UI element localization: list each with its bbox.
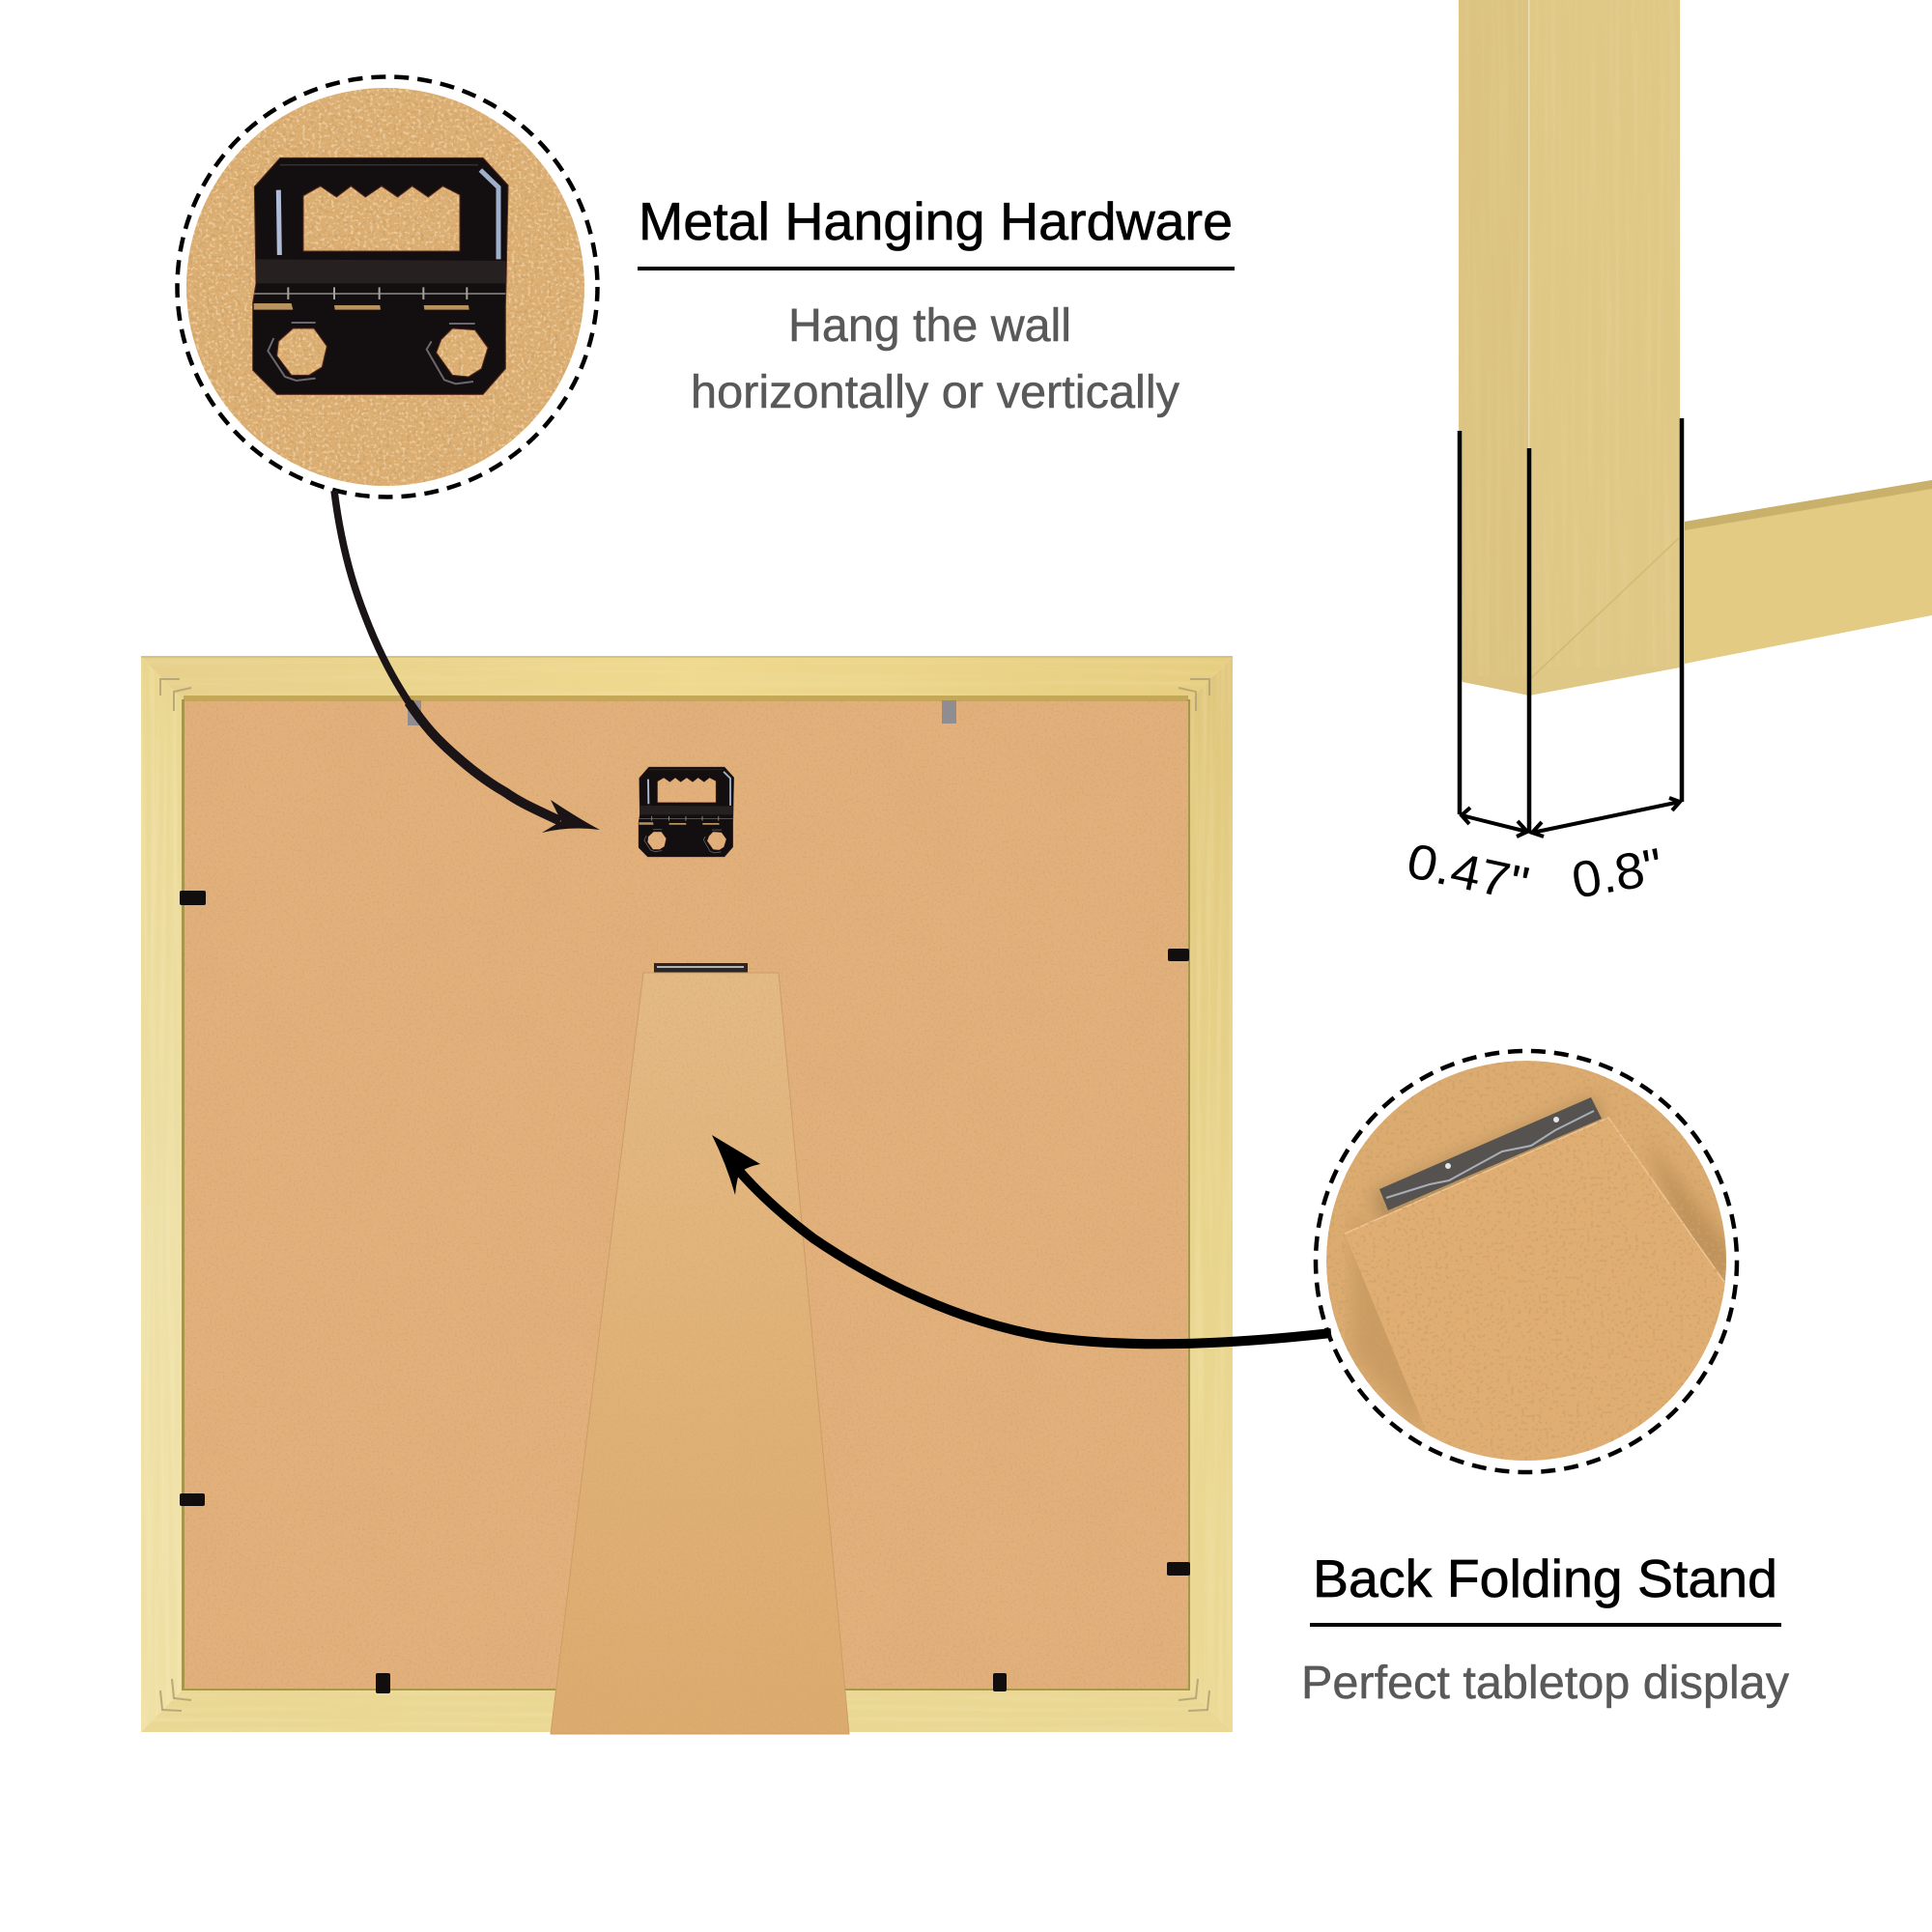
- frame moulding: [141, 656, 1233, 1732]
- text: hang description: horizontally or vertically: [691, 367, 1179, 418]
- label: 0.8 inch: 0.8": [1568, 838, 1667, 910]
- dashed ring: [178, 77, 597, 497]
- stand panel: [1345, 1117, 1725, 1461]
- frame front face: [1528, 0, 1680, 696]
- panel: hanging hardware detail circle: [178, 77, 597, 497]
- dashed ring: [1316, 1051, 1737, 1472]
- circle board texture: [1326, 1061, 1726, 1461]
- frame side face: [1459, 0, 1529, 696]
- panel: frame back view: [141, 656, 1233, 1734]
- heading: Metal Hanging Hardware: Metal Hanging Hardware: [639, 191, 1233, 251]
- stand hinge bar: [1379, 1097, 1602, 1210]
- text: stand description: Perfect tabletop display: [1301, 1658, 1789, 1709]
- panel: folding stand detail circle: [1316, 1051, 1739, 1507]
- metal tabs, top edge: [408, 700, 956, 725]
- text: hang description: Hang the wall: [788, 300, 1071, 352]
- heading: Back Folding Stand: Back Folding Stand: [1313, 1548, 1777, 1608]
- label: 0.47 inch: 0.47": [1403, 833, 1534, 912]
- horizontal frame arm: [1685, 480, 1932, 664]
- backing board: [185, 701, 1188, 1689]
- arrow: hardware circle to hanger: [334, 491, 600, 833]
- text: hang description: [691, 300, 1179, 418]
- heading rule: [1310, 1623, 1781, 1627]
- arrow: stand circle to stand: [712, 1135, 1331, 1344]
- heading rule: [638, 267, 1235, 270]
- stand hinge: [654, 963, 748, 974]
- black retaining clips: [180, 891, 1190, 1693]
- circle fill: [186, 88, 584, 486]
- corner staples: [160, 679, 1209, 1711]
- panel: frame corner profile: [1403, 0, 1932, 912]
- folding stand: [551, 973, 849, 1734]
- icon: sawtooth hanger: [253, 157, 508, 394]
- dimension lines: [1460, 418, 1682, 833]
- small hanging hardware: [639, 767, 734, 857]
- dimension arrow: 0.8: [1532, 798, 1680, 837]
- dimension arrow: 0.47: [1462, 808, 1527, 837]
